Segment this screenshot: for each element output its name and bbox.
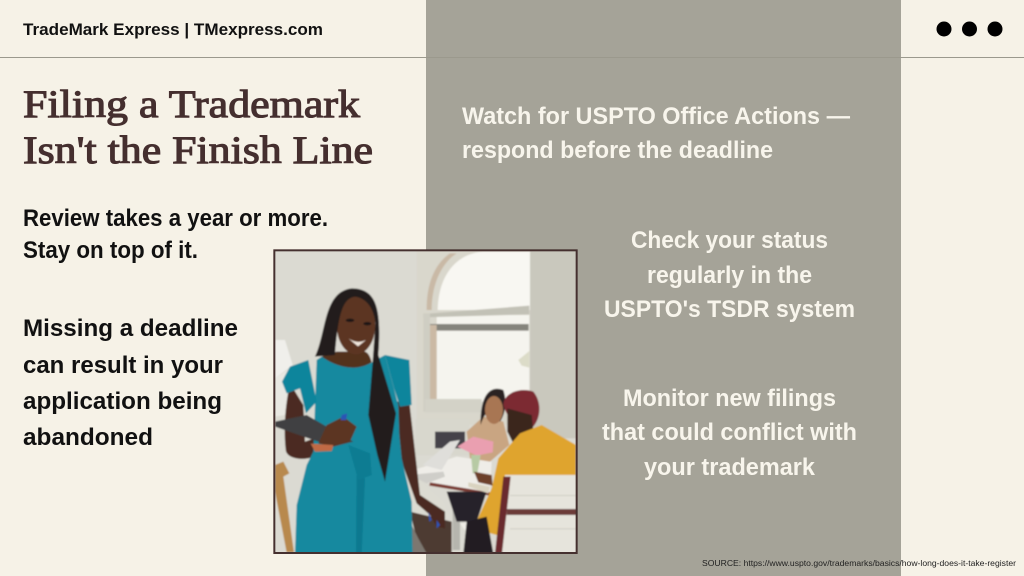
text block: monitor filings: that could conflict with <box>602 419 857 446</box>
text block: subtitle <box>23 205 328 264</box>
title <box>23 83 373 172</box>
text block: deadline warning: Missing a deadline <box>23 315 238 342</box>
text block: check status: Check your status <box>631 227 828 254</box>
text block: office actions <box>462 103 850 164</box>
text block: monitor filings: your trademark <box>644 454 816 481</box>
text block: deadline warning: application being <box>23 388 222 415</box>
text block: check status: USPTO's TSDR system <box>604 296 855 323</box>
text block: office actions: respond before the deadline <box>462 137 773 164</box>
text block: check status: regularly in the <box>647 262 812 289</box>
text block: deadline warning <box>23 315 238 451</box>
header: brand: TradeMark Express | TMexpress.com <box>23 20 323 39</box>
panel: grey centre band <box>426 0 901 576</box>
icon: three dots <box>936 22 1002 36</box>
source note: SOURCE: https://www.uspto.gov/trademarks/basics/how-long-does-it-take-register <box>702 558 1016 568</box>
text block: subtitle: Review takes a year or more. <box>23 205 328 232</box>
text block: deadline warning: can result in your <box>23 352 223 379</box>
text block: subtitle: Stay on top of it. <box>23 237 198 264</box>
text block: monitor filings <box>602 385 857 481</box>
photo: woman in teal jumpsuit in office <box>273 248 578 553</box>
title: Filing a Trademark <box>23 83 361 126</box>
text block: office actions: Watch for USPTO Office Actions — <box>462 103 850 130</box>
text block: check status <box>604 227 855 323</box>
text block: deadline warning: abandoned <box>23 424 153 451</box>
title: Isn't the Finish Line <box>23 129 373 172</box>
text block: monitor filings: Monitor new filings <box>623 385 836 412</box>
